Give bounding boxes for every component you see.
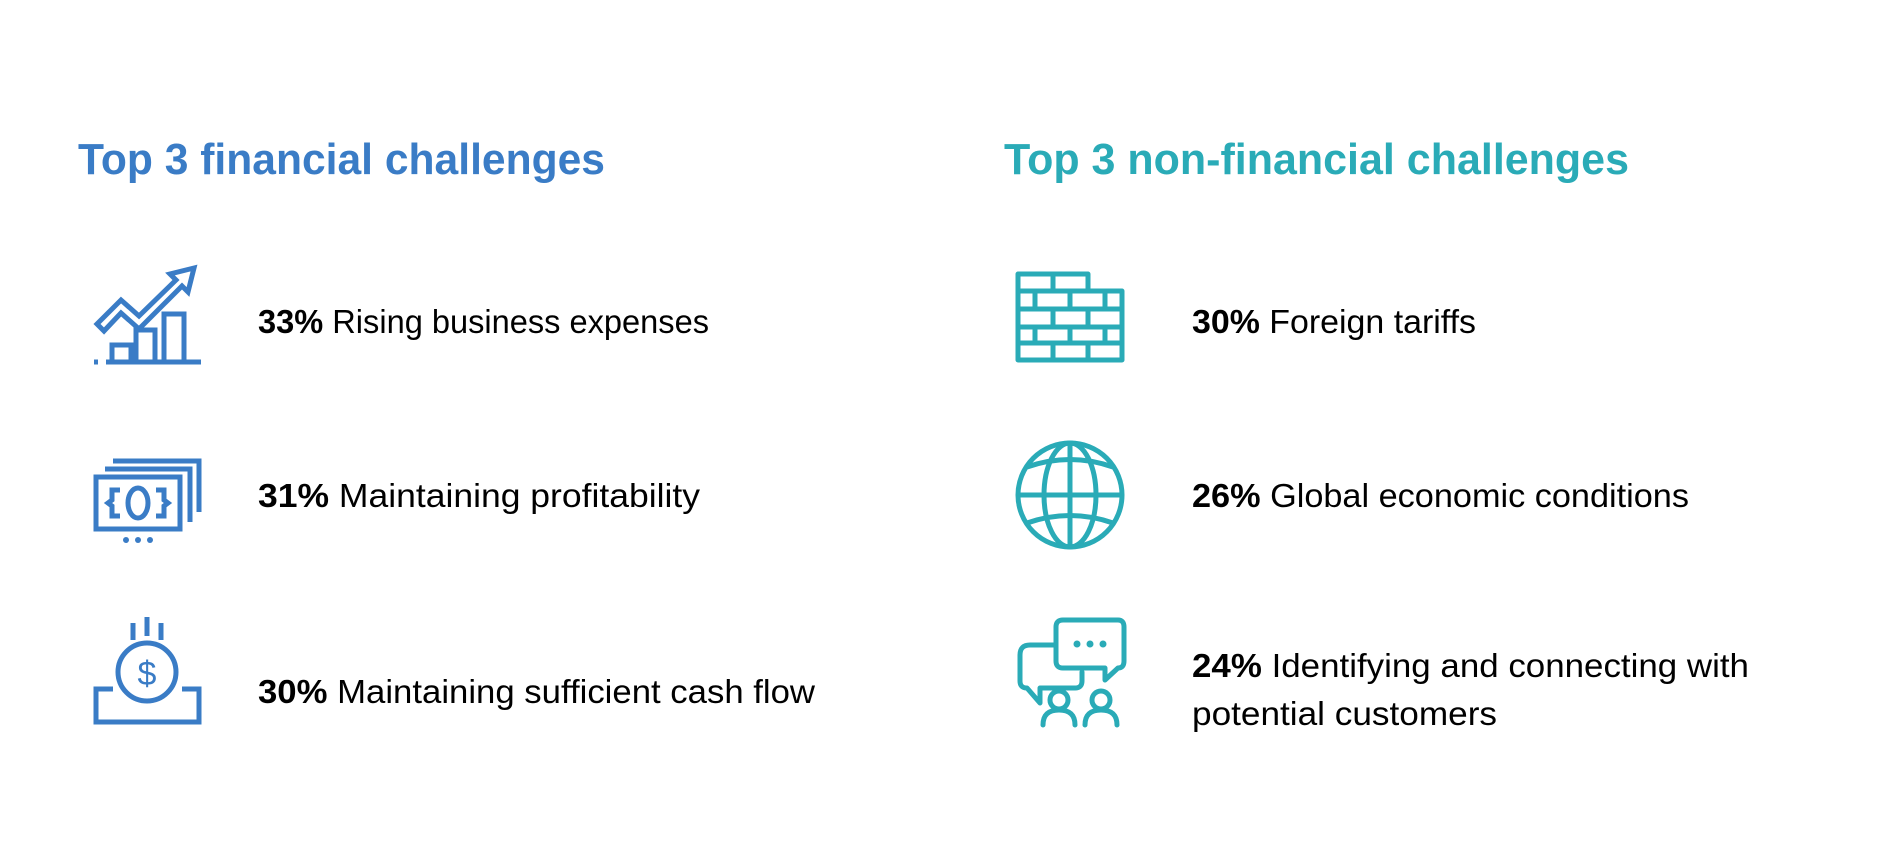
text: 30% tariffs: 30% Foreign tariffs	[1192, 303, 1476, 340]
text: 24%: 24% Identifying and connecting with	[1192, 647, 1749, 684]
icon: brick wall	[1018, 274, 1122, 360]
icon: coin	[96, 617, 199, 722]
text: 33%: 33% Rising business expenses	[258, 303, 709, 340]
icon: money	[96, 461, 199, 543]
icon: coin: $	[138, 655, 157, 693]
text: 26%: 26% Global economic conditions	[1192, 477, 1689, 514]
icon: globe	[1018, 443, 1122, 547]
icon: rising chart	[94, 268, 201, 362]
title: financial: Top 3 financial challenges	[78, 135, 605, 184]
text: 24%: potential customers	[1192, 695, 1497, 732]
title: non-financial: Top 3 non-financial challenges	[1004, 135, 1629, 184]
text: 31%: 31% Maintaining profitability	[258, 477, 701, 514]
icon: chat people	[1020, 620, 1124, 725]
text: 30% cash: 30% Maintaining sufficient cash flow	[258, 673, 815, 710]
text: 24%	[1192, 647, 1749, 732]
